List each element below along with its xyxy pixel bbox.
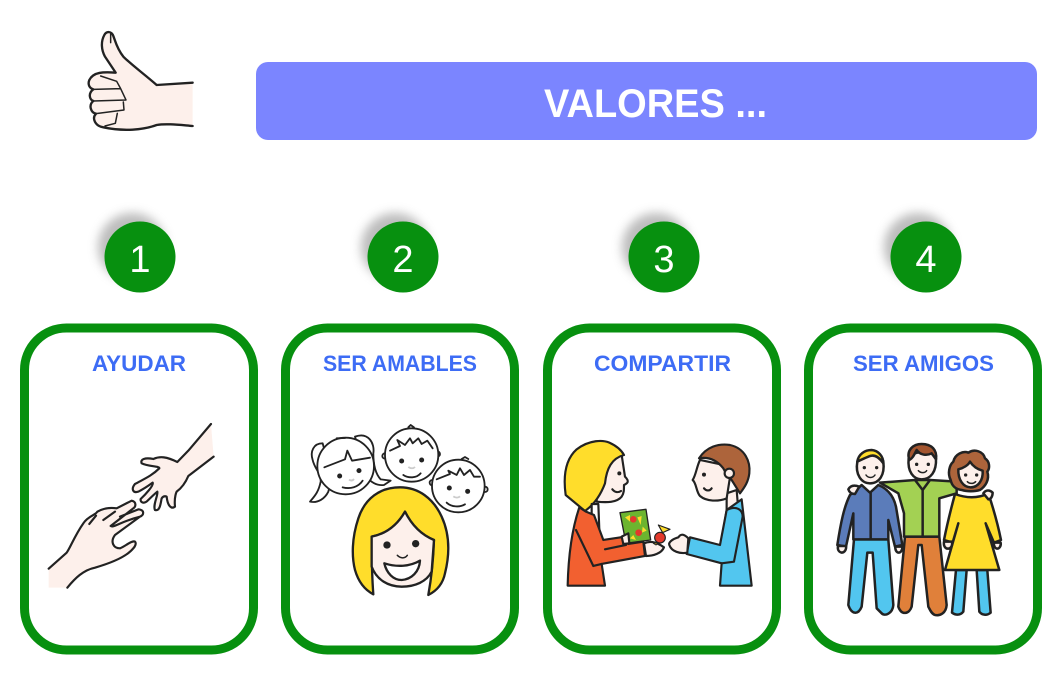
boy [669, 445, 752, 586]
heading: ayudar: AYUDAR [92, 351, 186, 376]
number badge 3: 3 [653, 239, 675, 281]
heading: ser amigos: SER AMIGOS [853, 351, 994, 376]
number badge 2: 2 [392, 239, 414, 281]
panel: ser amables [286, 328, 514, 650]
icon: thumbs up [89, 32, 193, 130]
number badge 3 [622, 213, 700, 292]
title banner [256, 62, 1037, 140]
panel: ser amigos [808, 328, 1038, 650]
panel: compartir [548, 328, 776, 650]
number badge 1: 1 [129, 239, 151, 281]
number badge 1 [98, 213, 176, 292]
candy box [620, 509, 651, 543]
candy [653, 525, 670, 545]
girl [944, 451, 1001, 615]
icon: sharing candy [565, 441, 752, 586]
number badge 4 [884, 213, 962, 292]
left boy [837, 450, 902, 615]
number badge 2 [361, 213, 438, 292]
heading: ser amables: SER AMABLES [323, 351, 477, 376]
girl [565, 441, 645, 586]
icon: children and smiling girl [310, 425, 488, 595]
title banner: VALORES ... [544, 82, 767, 126]
middle boy [880, 444, 957, 615]
panel: ayudar [24, 328, 254, 650]
number badge 4: 4 [915, 239, 937, 281]
icon: three friends [837, 444, 1001, 615]
icon: reaching hands [49, 424, 214, 588]
heading: compartir: COMPARTIR [594, 351, 731, 376]
